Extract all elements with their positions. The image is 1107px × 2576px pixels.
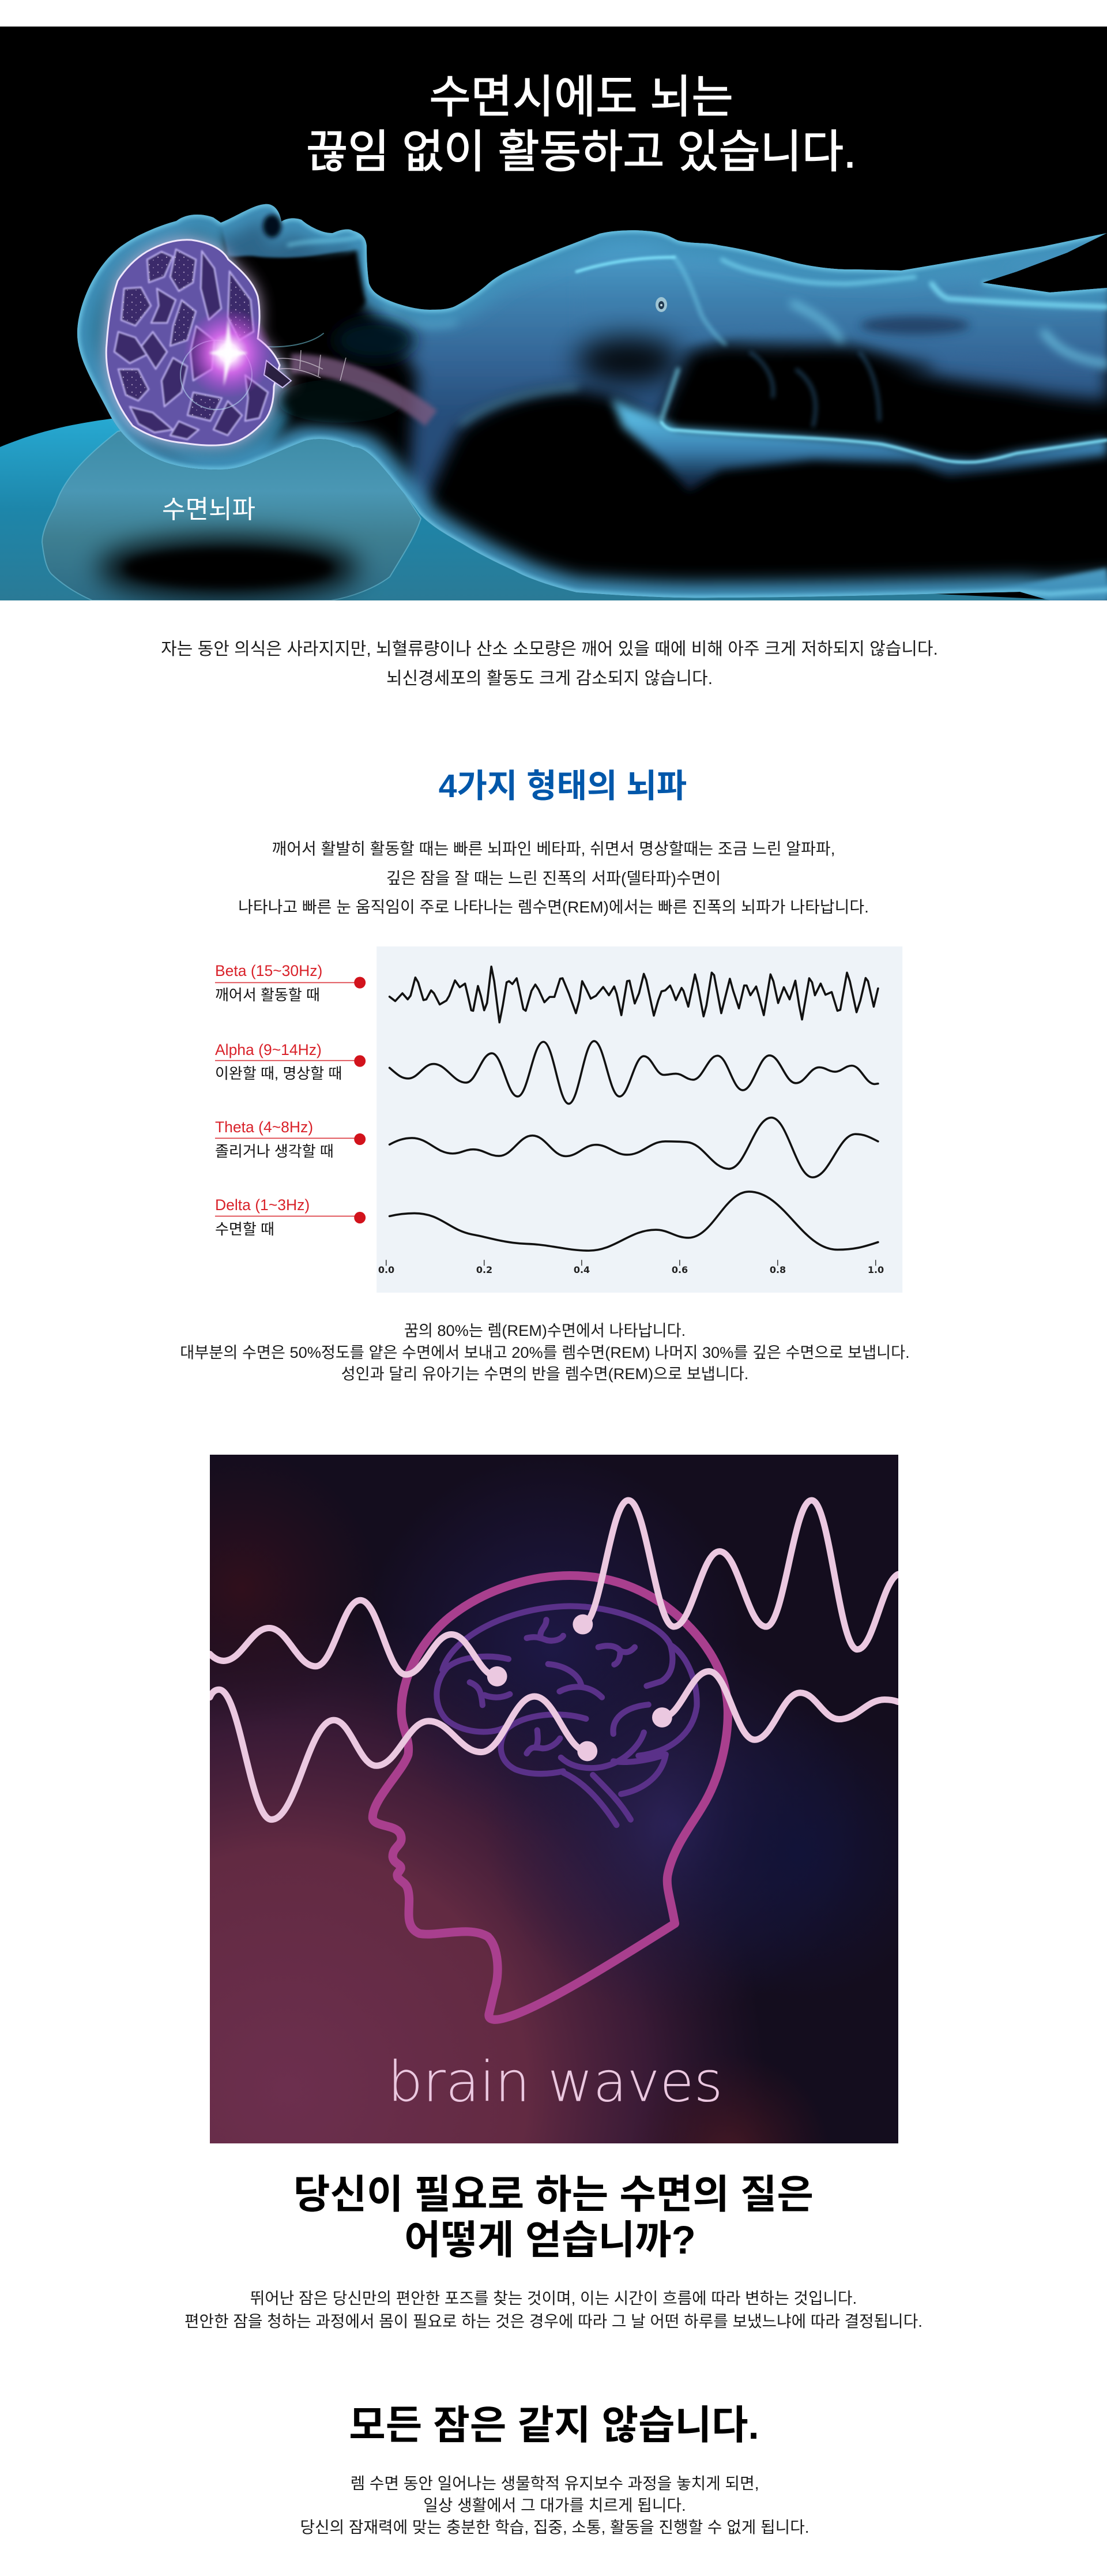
text block: missing REM sleep: 렘 수면 동안 일어나는 생물학적 유지보수 과정을 놓치게 되면,	[351, 2474, 759, 2492]
panel: hero sleeping body with brain	[0, 27, 1107, 600]
text block: good sleep: 편안한 잠을 청하는 과정에서 몸이 필요로 하는 것은 경우에 따라 그 날 어떤 하루를 보냈느냐에 따라 결정됩니다.	[184, 2312, 922, 2330]
arm band	[611, 398, 1107, 490]
label: theta: 졸리거나 생각할 때	[215, 1143, 334, 1160]
heading: quality of sleep: 당신이 필요로 하는 수면의 질은	[293, 2172, 814, 2217]
bright highlights	[259, 236, 1107, 462]
text block: description of brainwaves: 깊은 잠을 잘 때는 느린 진폭의 서파(델타파)수면이	[386, 869, 721, 887]
wave: alpha	[390, 1041, 878, 1104]
label: sleep brainwave: 수면뇌파	[162, 495, 255, 524]
spark	[183, 308, 273, 398]
connector lines and dots	[215, 977, 366, 1223]
axis labels: 0.6	[672, 1264, 688, 1275]
brain wave lines	[210, 1500, 898, 1820]
heading: not all sleep is equal: 모든 잠은 같지 않습니다.	[349, 2403, 759, 2447]
pillow	[42, 421, 421, 600]
illustration: glowing brain	[106, 240, 294, 445]
head interior	[69, 213, 291, 479]
axis ticks	[386, 1260, 876, 1266]
axis labels: 0.4	[574, 1264, 590, 1275]
wave: beta	[390, 967, 878, 1023]
glow ribbons along outline	[77, 204, 1107, 598]
axis labels: 0.8	[770, 1264, 786, 1275]
text block: REM sleep facts: 성인과 달리 유아기는 수면의 반을 렘수면(REM)으로 보냅니다.	[341, 1365, 748, 1383]
text block: description of brainwaves: 나타나고 빠른 눈 움직임이 주로 나타나는 렘수면(REM)에서는 빠른 진폭의 뇌파가 나타납니다.	[238, 898, 869, 916]
text block: missing REM sleep: 당신의 잠재력에 맞는 충분한 학습, 집중, 소통, 활동을 진행할 수 없게 됩니다.	[300, 2518, 809, 2536]
icon: brain lines	[436, 1606, 697, 1825]
text block: REM sleep facts: 대부분의 수면은 50%정도를 얕은 수면에서 보내고 20%를 렘수면(REM) 나머지 30%를 깊은 수면으로 보냅니다.	[180, 1343, 910, 1361]
rib hints	[750, 352, 879, 427]
label: alpha: 이완할 때, 명상할 때	[215, 1065, 342, 1082]
text block: missing REM sleep	[1, 2473, 1107, 2540]
wave plot	[214, 947, 902, 1293]
text block: description of brainwaves: 깨어서 활발히 활동할 때는 빠른 뇌파인 베타파, 쉬면서 명상할때는 조금 느린 알파파,	[272, 840, 835, 858]
text block: intro: 뇌신경세포의 활동도 크게 감소되지 않습니다.	[386, 669, 713, 688]
background gradient	[210, 1455, 898, 2143]
body silhouette	[0, 196, 1107, 606]
wave: theta	[390, 1118, 878, 1177]
text block: good sleep: 뛰어난 잠은 당신만의 편안한 포즈를 찾는 것이며, 이는 시간이 흐름에 따라 변하는 것입니다.	[250, 2289, 857, 2307]
axis labels: 1.0	[868, 1264, 884, 1275]
heading: quality of sleep	[293, 2172, 814, 2262]
spinal band	[291, 363, 431, 418]
title: 수면시에도 뇌는	[429, 72, 733, 122]
mattress surface	[0, 418, 1072, 600]
text block: good sleep	[0, 2287, 1107, 2334]
title	[306, 72, 856, 177]
title: 끊임 없이 활동하고 있습니다.	[306, 126, 856, 177]
brain stem	[264, 361, 291, 388]
face	[221, 204, 369, 258]
chart: four brainwave types	[214, 947, 902, 1293]
text block: REM sleep facts: 꿈의 80%는 렘(REM)수면에서 나타납니다.	[404, 1321, 686, 1339]
dark shading	[235, 250, 366, 344]
label: beta	[215, 962, 322, 1004]
text block: intro	[161, 640, 938, 688]
icon: head outline	[372, 1576, 728, 2019]
label: delta	[215, 1196, 310, 1238]
wave: delta	[390, 1192, 878, 1251]
label: delta: Delta (1~3Hz)	[215, 1196, 310, 1214]
axis labels: 0.2	[476, 1264, 492, 1275]
text block: description of brainwaves	[238, 840, 869, 916]
text block: intro: 자는 동안 의식은 사라지지만, 뇌혈류량이나 산소 소모량은 깨어 있을 때에 비해 아주 크게 저하되지 않습니다.	[161, 640, 938, 659]
heading: quality of sleep: 어떻게 얻습니까?	[404, 2218, 696, 2262]
text block: missing REM sleep: 일상 생활에서 그 대가를 치르게 됩니다.	[423, 2496, 686, 2514]
text block: REM sleep facts	[180, 1321, 910, 1383]
axis labels	[378, 1264, 884, 1275]
caption: brain waves: brain waves	[387, 2049, 723, 2114]
axis labels: 0.0	[378, 1264, 394, 1275]
label: alpha: Alpha (9~14Hz)	[215, 1041, 322, 1058]
label: theta	[215, 1118, 334, 1160]
illustration: brain waves poster	[210, 1455, 898, 2143]
label: beta: 깨어서 활동할 때	[215, 986, 320, 1004]
illustration: translucent sleeping body	[0, 204, 1107, 600]
label: beta: Beta (15~30Hz)	[215, 962, 322, 979]
label: alpha	[215, 1041, 342, 1082]
lower right leg	[980, 568, 1107, 600]
neck and torso lit area	[361, 230, 1107, 506]
label: delta: 수면할 때	[215, 1221, 274, 1238]
label: theta: Theta (4~8Hz)	[215, 1118, 313, 1136]
icon: chest detail	[656, 297, 667, 312]
heading: four brainwaves: 4가지 형태의 뇌파	[439, 768, 687, 805]
